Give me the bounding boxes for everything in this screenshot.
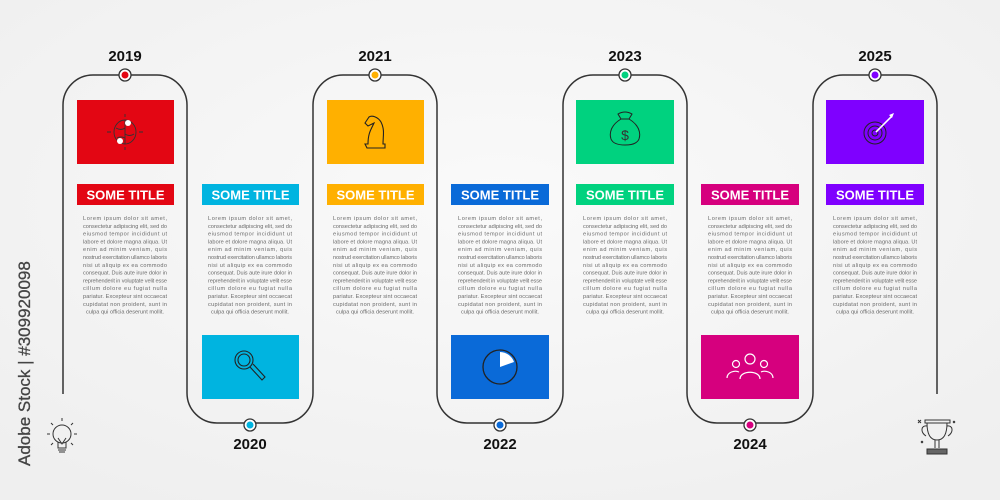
step 2019 <box>77 48 174 316</box>
icon: trophy <box>918 420 955 454</box>
step 2022: 2022 <box>483 436 517 453</box>
step 2019: SOME TITLE <box>86 188 165 202</box>
step 2024 <box>701 184 799 453</box>
step 2024: SOME TITLE <box>711 188 789 202</box>
step 2020: SOME TITLE <box>212 188 290 202</box>
step 2025: 2025 <box>858 48 892 65</box>
step 2023: 2023 <box>608 48 642 65</box>
side watermark text: Adobe Stock | #309920098 <box>15 261 34 466</box>
step 2023: $ <box>621 127 629 143</box>
step 2023: SOME TITLE <box>586 188 664 202</box>
step 2025 <box>826 48 924 316</box>
step 2025: SOME TITLE <box>836 188 914 202</box>
step 2024: 2024 <box>733 436 767 453</box>
step 2023 <box>576 48 674 316</box>
step 2021 <box>327 48 424 316</box>
step 2020 <box>202 184 299 453</box>
step 2020: 2020 <box>233 436 267 453</box>
step 2019: 2019 <box>108 48 142 65</box>
step 2022: SOME TITLE <box>461 188 539 202</box>
timeline path <box>63 75 937 423</box>
step 2022 <box>451 184 549 453</box>
icon: light bulb <box>47 418 77 452</box>
step 2021: 2021 <box>358 48 392 65</box>
step 2021: SOME TITLE <box>336 188 415 202</box>
